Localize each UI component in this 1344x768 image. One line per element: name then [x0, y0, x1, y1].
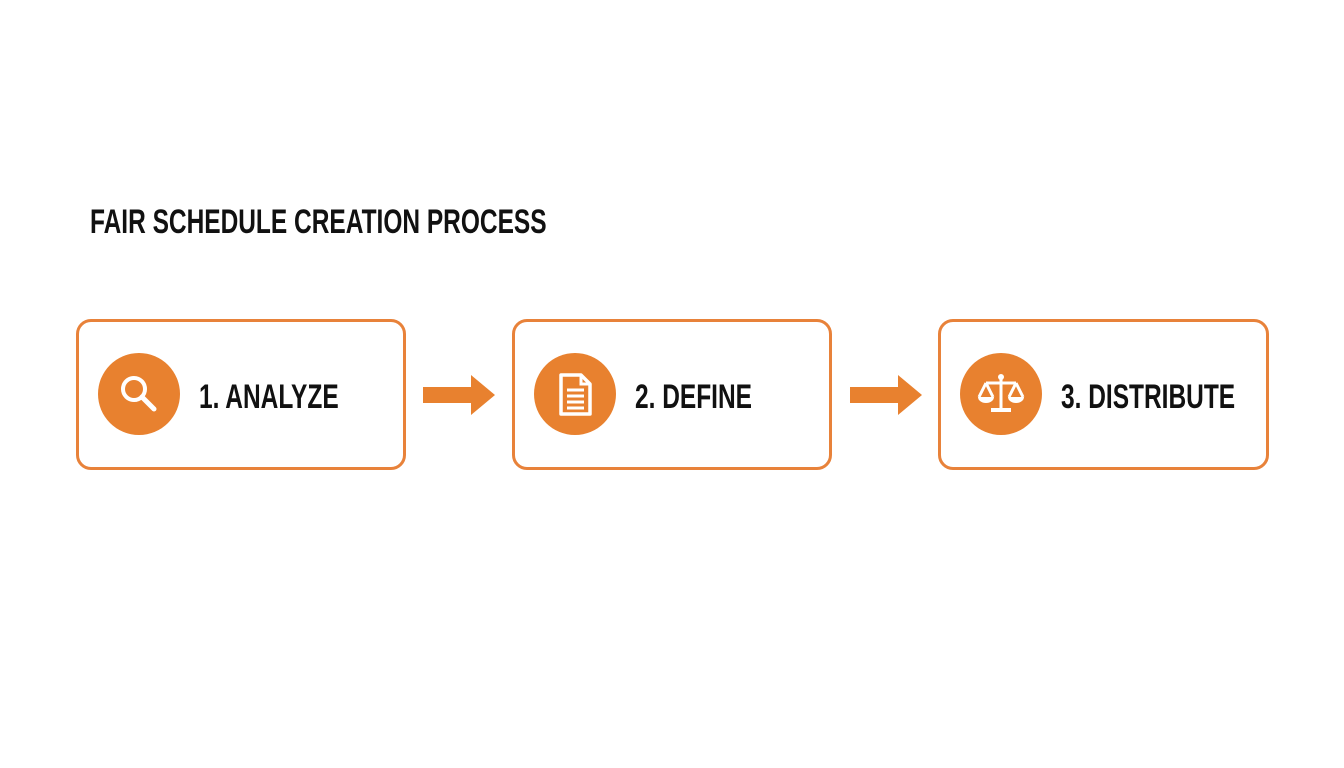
arrow 2: [850, 375, 922, 415]
label: 2. DEFINE: [635, 378, 752, 416]
title: FAIR SCHEDULE CREATION PROCESS: [90, 203, 547, 241]
panel: distribute: [938, 319, 1269, 470]
panel: analyze: [76, 319, 406, 470]
label: 1. ANALYZE: [199, 378, 339, 416]
icon: magnifier: [98, 353, 180, 435]
icon: document: [534, 353, 616, 435]
panel: define: [512, 319, 832, 470]
icon: scales: [960, 353, 1042, 435]
arrow 1: [423, 375, 495, 415]
label: 3. DISTRIBUTE: [1061, 378, 1235, 416]
